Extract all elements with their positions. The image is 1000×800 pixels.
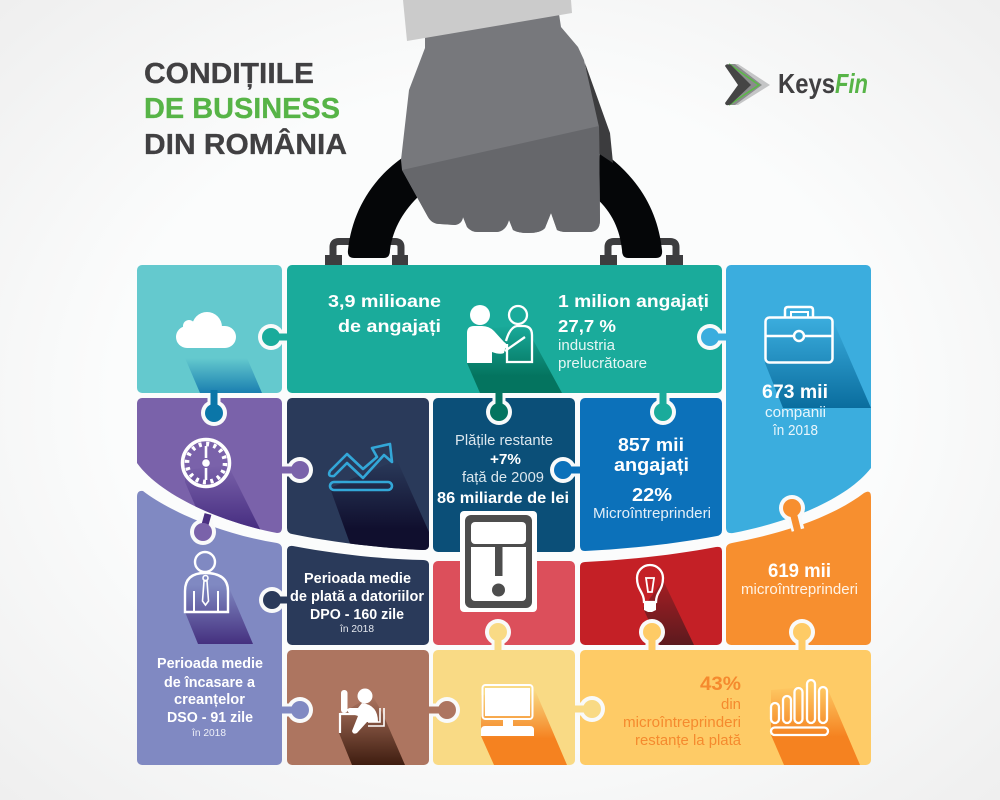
text: DSO [157, 656, 263, 739]
text: late payments: Plățile restante [455, 433, 553, 449]
panel: navy growth chart [287, 398, 429, 552]
text: 1 milion angajati [558, 291, 709, 372]
text: 619 mii: microîntreprinderi [741, 582, 858, 598]
tab: cyan into purple [201, 390, 227, 426]
panel: pale yellow computer [433, 619, 605, 765]
text: DSO: Perioada medie [157, 656, 263, 672]
text: employees: angajați [614, 455, 689, 475]
text: 43% [623, 674, 742, 749]
tab: to pale yellow [427, 697, 460, 723]
briefcase handle [348, 150, 662, 258]
tab: to cyan [258, 324, 289, 350]
tab: to blue [650, 390, 676, 425]
icon shadow [339, 695, 405, 765]
panel: orange micro-enterprises [726, 492, 871, 645]
tab: to red [639, 619, 665, 652]
tab: to periwinkle [190, 514, 216, 545]
title [144, 58, 347, 161]
icon: computer [481, 685, 534, 736]
icon: briefcase [766, 307, 832, 362]
text: 1 milion angajati: industria [558, 338, 616, 354]
text: DSO: în 2018 [191, 727, 226, 739]
text: 43%: microîntreprinderi [623, 715, 741, 731]
hand holding the briefcase [401, 0, 613, 233]
icon shadow [771, 685, 860, 765]
icon: light bulb [637, 565, 663, 612]
tab: to pink [485, 619, 511, 652]
panel: pink [433, 561, 575, 645]
text: DPO: DPO - 160 zile [310, 607, 404, 623]
text: DPO: în 2018 [339, 623, 374, 635]
text: employees: 857 mii [618, 435, 684, 455]
icon shadow [643, 580, 694, 645]
title: DIN ROMÂNIA [144, 127, 347, 161]
panel: sky companies [697, 265, 871, 533]
text: DPO: de plată a datoriilor [290, 589, 424, 605]
briefcase clips [325, 242, 683, 262]
icon: growth arrow [329, 444, 392, 490]
icon: bar chart [771, 680, 828, 735]
panel: yellow 43% [580, 619, 871, 765]
text: 43%: 43% [700, 674, 741, 695]
panel: periwinkle DSO [137, 491, 313, 765]
title: DE BUSINESS [144, 93, 340, 125]
panel: brown desk worker [287, 650, 460, 765]
icon: handshake [467, 305, 532, 363]
tab: to yellow [573, 696, 605, 722]
title: CONDIȚIILE [144, 58, 314, 90]
panel: purple stopwatch [137, 390, 313, 545]
tab: to sky [779, 495, 805, 532]
icon: stopwatch [182, 440, 230, 486]
panel: navy DPO [259, 546, 429, 645]
icon: business person [185, 552, 228, 612]
text: 1 milion angajati: 27,7 % [558, 316, 616, 336]
text: 673 mii companii [762, 382, 828, 439]
panel: cyan with cloud [137, 265, 282, 393]
text: 619 mii: 619 mii [768, 561, 831, 582]
text: employees: Microîntreprinderi [593, 506, 711, 522]
text: DPO [290, 571, 424, 635]
icon: person at desk [340, 688, 384, 734]
logo: KeysFin: Fin [835, 68, 868, 99]
text: DSO: DSO - 91 zile [167, 710, 253, 726]
text: DSO: creanțelor [174, 692, 245, 708]
tab: to navy chart [280, 457, 313, 483]
tab: to brown [280, 697, 313, 723]
text: 673 mii companii: în 2018 [772, 423, 818, 439]
icon shadow [331, 473, 429, 550]
tab [550, 457, 582, 483]
icon shadow [765, 318, 871, 408]
icon shadow [185, 475, 260, 530]
text: 673 mii companii: 673 mii [762, 382, 828, 403]
text: late payments: față de 2009 [462, 470, 544, 486]
logo: KeysFin [725, 64, 868, 105]
text: 3,9 milioane: de angajați [338, 316, 441, 336]
icon: cloud [176, 312, 236, 348]
tab: to late payments [486, 390, 512, 425]
text: late payments [437, 433, 569, 507]
panel: late payments [433, 398, 575, 552]
tab: to orange [789, 619, 815, 652]
text: 3,9 milioane: 3,9 milioane [328, 291, 441, 311]
text: employees [593, 435, 711, 522]
text: 3,9 milioane [328, 291, 441, 336]
panel: red with light bulb [580, 547, 722, 645]
text: employees: 22% [632, 485, 672, 505]
icon shadow [185, 358, 262, 393]
text: 43%: din [721, 697, 741, 713]
text: 1 milion angajati: prelucrătoare [558, 356, 647, 372]
icon shadow [467, 325, 562, 393]
logo: KeysFin: Keys [778, 68, 835, 99]
text: late payments: 86 miliarde de lei [437, 490, 569, 507]
text: late payments: +7% [490, 452, 521, 468]
text: DSO: de încasare a [164, 675, 256, 691]
icon shadow [481, 690, 567, 765]
text: DPO: Perioada medie [304, 571, 411, 587]
text: 1 milion angajati: 1 milion angajați [558, 291, 709, 311]
panel: 857 mii angajati [550, 398, 722, 551]
icon: device with exclamation mark [460, 511, 537, 612]
shirt cuff [403, 0, 572, 41]
text: 43%: restanțe la plată [635, 733, 742, 749]
text: 673 mii companii: companii [765, 405, 826, 421]
icon shadow [185, 585, 253, 644]
panel: teal employees [258, 265, 722, 425]
tab: to periwinkle [259, 587, 289, 613]
tab: to teal [697, 324, 728, 350]
text: 619 mii [741, 561, 858, 598]
